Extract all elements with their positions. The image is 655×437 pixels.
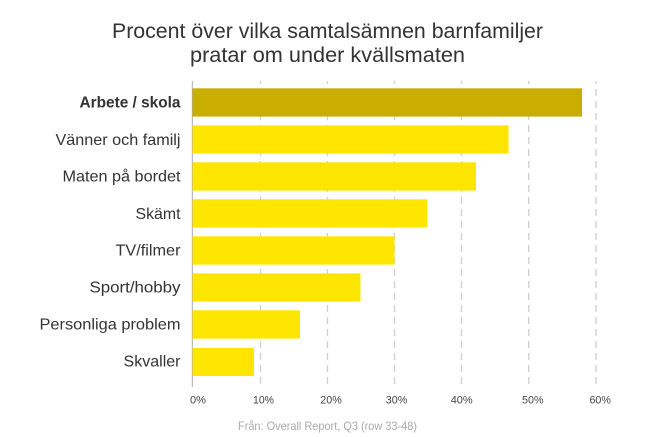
bar: Vänner och familj 47%	[192, 125, 508, 154]
bar: Personliga problem 16%	[192, 310, 300, 339]
title: Procent över vilka samtalsämnen barnfamiljer	[112, 20, 543, 43]
x axis labels: 40%	[451, 394, 473, 406]
source note: Från: Overall Report, Q3 (row 33-48)	[238, 419, 417, 433]
title: pratar om under kvällsmaten	[190, 44, 465, 67]
category labels: Arbete / skola	[80, 94, 181, 112]
category labels: TV/filmer	[116, 242, 181, 260]
category labels: Skvaller	[124, 354, 181, 370]
category labels: Vänner och familj	[56, 132, 180, 149]
x axis labels: 20%	[320, 394, 342, 406]
bar: Maten på bordet 42%	[192, 162, 476, 191]
bar: Skämt 35%	[192, 199, 428, 228]
category labels: Skämt	[136, 206, 181, 223]
bars	[192, 88, 582, 376]
bar: TV/filmer 30%	[192, 236, 394, 265]
category labels: Personliga problem	[40, 316, 180, 334]
bar: Arbete / skola 58%	[192, 88, 582, 117]
category labels	[40, 94, 181, 370]
x axis labels: 0%	[190, 394, 206, 406]
bar: Skvaller 9%	[192, 348, 254, 376]
category labels: Sport/hobby	[90, 280, 180, 296]
bar: Sport/hobby 25%	[192, 273, 360, 302]
x axis labels: 10%	[253, 394, 274, 406]
x axis labels: 50%	[522, 394, 544, 406]
x axis labels	[190, 394, 611, 406]
x axis labels: 30%	[386, 394, 407, 406]
title	[112, 20, 543, 67]
x axis labels: 60%	[589, 394, 611, 406]
category labels: Maten på bordet	[62, 168, 181, 186]
